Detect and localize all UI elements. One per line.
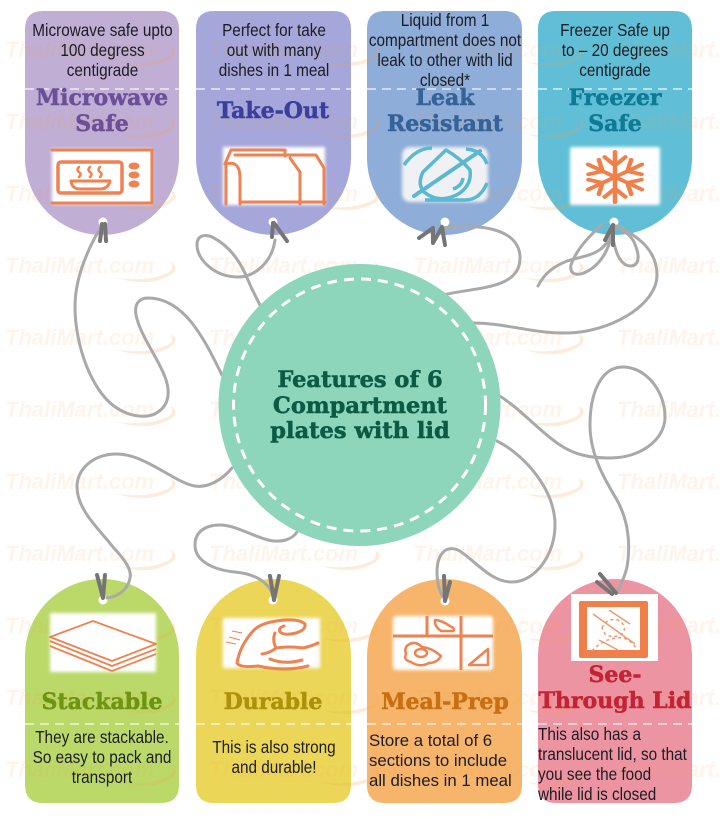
tag: take-out background <box>196 11 351 235</box>
watermark pattern: ThaliMart.com <box>209 325 358 350</box>
watermark pattern: ThaliMart.com <box>5 613 154 638</box>
clip: durable <box>270 576 279 600</box>
watermark pattern: ThaliMart.com <box>5 253 154 278</box>
watermark pattern: ThaliMart.com <box>413 397 562 422</box>
watermark pattern: ThaliMart.com <box>209 253 358 278</box>
panel: meal-prep text <box>369 689 512 790</box>
tag: freezer safe background <box>538 11 692 235</box>
description: see-through lid: you see the food <box>538 765 651 784</box>
watermark pattern: ThaliMart.com <box>209 757 358 782</box>
watermark pattern: ThaliMart.com <box>413 253 562 278</box>
description: see-through lid: This also has a <box>538 725 642 744</box>
watermark pattern: ThaliMart.com <box>5 37 154 62</box>
watermark pattern: ThaliMart.com <box>209 37 358 62</box>
heading: take-out: Take-Out <box>217 98 330 124</box>
icon: snowflake <box>570 147 660 205</box>
heading: freezer safe: Freezer <box>569 85 662 111</box>
heading: meal-prep: Meal-Prep <box>381 689 509 715</box>
clip: take-out <box>272 223 287 241</box>
watermark pattern: ThaliMart.com <box>209 181 358 206</box>
description: stackable: So easy to pack and <box>33 748 171 767</box>
title: plates with lid <box>270 418 450 444</box>
clip: meal-prep <box>444 576 450 601</box>
watermark pattern: ThaliMart.com <box>209 541 358 566</box>
description: take-out: out with many <box>227 41 322 60</box>
clip: freezer safe <box>605 225 613 245</box>
tag: durable background <box>196 579 351 803</box>
description: durable: and durable! <box>231 758 317 777</box>
watermark pattern: ThaliMart.com <box>413 757 562 782</box>
watermark pattern: ThaliMart.com <box>413 325 562 350</box>
description: leak resistant: closed* <box>420 71 471 90</box>
panel: microwave safe text <box>32 21 173 137</box>
description: freezer safe: Freezer Safe up <box>560 21 670 40</box>
clip: leak resistant <box>419 227 445 245</box>
heading: microwave safe: Microwave <box>36 85 168 111</box>
panel: leak resistant text <box>369 11 522 137</box>
icon: take-out boxes <box>223 147 325 205</box>
tag holes <box>98 218 618 606</box>
heading: durable: Durable <box>224 689 322 715</box>
watermark pattern: ThaliMart.com <box>5 181 154 206</box>
description: leak resistant: compartment does not <box>369 31 522 50</box>
description: microwave safe: 100 degress <box>60 41 145 60</box>
tag: see-through lid background <box>538 579 692 803</box>
icon: flexed arm <box>223 618 320 669</box>
clip: stackable <box>97 575 105 598</box>
string: freezer safe loops <box>473 224 657 333</box>
clip: microwave safe <box>100 224 106 241</box>
heading: leak resistant: Resistant <box>387 111 504 137</box>
description: see-through lid: translucent lid, so that <box>538 745 687 764</box>
title: Features of 6 <box>277 367 443 393</box>
watermark pattern: ThaliMart.com <box>413 469 562 494</box>
panel: freezer safe text <box>560 21 670 137</box>
description: freezer safe: centigrade <box>579 61 651 80</box>
description: take-out: Perfect for take <box>222 21 326 40</box>
description: leak resistant: Liquid from 1 <box>401 11 489 30</box>
string: take-out to hub <box>197 236 275 305</box>
icon: compartment plate <box>393 616 493 670</box>
watermark pattern: ThaliMart.com <box>413 685 562 710</box>
description: meal-prep: Store a total of 6 <box>369 731 492 750</box>
description: stackable: They are stackable. <box>35 728 169 747</box>
watermark pattern: ThaliMart.com <box>209 613 358 638</box>
description: take-out: dishes in 1 meal <box>219 61 329 80</box>
tag: meal-prep background <box>367 579 522 803</box>
description: microwave safe: Microwave safe upto <box>32 21 173 40</box>
description: leak resistant: leak to other with lid <box>377 51 513 70</box>
icon: microwave <box>52 149 152 204</box>
watermark pattern: ThaliMart.com <box>5 469 154 494</box>
tag: stackable background <box>25 579 179 803</box>
panel: take-out text <box>217 21 330 124</box>
icon: stacked sheets <box>50 613 156 672</box>
string: hub to meal-prep <box>437 441 555 597</box>
watermark pattern: ThaliMart.com <box>5 541 154 566</box>
icon: see-through lid <box>571 594 658 661</box>
tag: microwave safe background <box>25 11 179 235</box>
tag: leak resistant background <box>367 11 522 235</box>
watermark pattern: ThaliMart.com <box>5 109 154 134</box>
string: leak resistant to hub <box>443 226 520 295</box>
watermark pattern: ThaliMart.com <box>413 109 562 134</box>
description: meal-prep: sections to include <box>369 751 507 770</box>
panel: see-through lid text <box>537 662 691 804</box>
heading: see-through lid: Through Lid <box>539 688 691 714</box>
central hub circle <box>218 264 500 546</box>
watermark pattern: ThaliMart.com <box>5 685 154 710</box>
watermark pattern: ThaliMart.com <box>413 37 562 62</box>
string: microwave safe to hub <box>75 232 222 416</box>
string: hub to durable <box>195 525 297 595</box>
panel: durable text <box>212 689 336 777</box>
clip: see-through lid <box>597 574 616 594</box>
string: hub to see-through lid <box>498 367 665 590</box>
watermark pattern: ThaliMart.com <box>209 397 358 422</box>
description: stackable: transport <box>72 768 133 787</box>
title: Compartment <box>273 393 448 419</box>
watermark pattern: ThaliMart.com <box>209 109 358 134</box>
string: hub to stackable <box>77 454 232 598</box>
icon: no leak drop <box>402 147 488 202</box>
description: meal-prep: all dishes in 1 meal <box>369 771 512 790</box>
watermark pattern: ThaliMart.com <box>5 757 154 782</box>
description: freezer safe: to – 20 degrees <box>562 41 668 60</box>
watermark pattern: ThaliMart.com <box>5 325 154 350</box>
watermark pattern: ThaliMart.com <box>5 397 154 422</box>
heading: freezer safe: Safe <box>588 111 642 137</box>
heading: see-through lid: See- <box>588 662 642 688</box>
watermark pattern: ThaliMart.com <box>209 469 358 494</box>
heading: leak resistant: Leak <box>416 85 475 111</box>
watermark pattern: ThaliMart.com <box>209 685 358 710</box>
heading: stackable: Stackable <box>42 689 162 715</box>
heading: microwave safe: Safe <box>75 111 129 137</box>
watermark pattern: ThaliMart.com <box>413 613 562 638</box>
watermark pattern: ThaliMart.com <box>413 181 562 206</box>
description: microwave safe: centigrade <box>67 61 138 80</box>
description: durable: This is also strong <box>212 738 336 757</box>
description: see-through lid: while lid is closed <box>537 785 656 804</box>
panel: stackable text <box>33 689 171 787</box>
watermark pattern: ThaliMart.com <box>413 541 562 566</box>
